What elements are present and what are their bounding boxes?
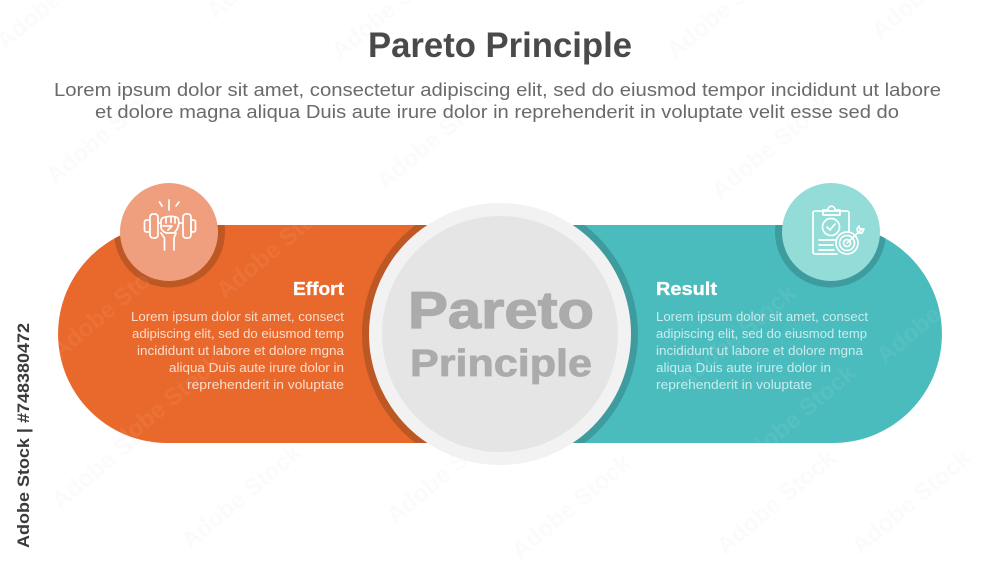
central circle outer ring <box>369 203 631 465</box>
icon: fist with dumbbell <box>120 183 218 281</box>
result body text: Lorem ipsum dolor sit amet, consect <box>656 309 868 324</box>
result watermark <box>672 254 1000 475</box>
effort body text: aliqua Duis aute irure dolor in <box>169 360 344 375</box>
effort body text: adipiscing elit, sed do eiusmod temp <box>132 326 344 341</box>
stock watermark pattern on background: Adobe Stock <box>382 414 512 530</box>
effort heading: Effort <box>293 278 344 299</box>
result icon disc <box>782 183 880 281</box>
effort watermark: Adobe Stock <box>212 189 342 305</box>
panel: effort <box>58 225 428 443</box>
result heading: Result <box>656 278 717 299</box>
stock watermark pattern on background: Adobe Stock <box>372 79 502 195</box>
effort watermark: Adobe Stock <box>97 349 227 465</box>
effort icon disc <box>120 183 218 281</box>
panel: result <box>572 225 942 443</box>
stock watermark pattern on background: Adobe Stock <box>47 399 177 515</box>
central label: Pareto: Pareto <box>408 282 594 340</box>
effort watermark <box>47 189 342 465</box>
clipboard and target glyph <box>813 206 864 254</box>
effort pill inner shadow ring <box>362 225 428 443</box>
stock watermark pattern on background: Adobe Stock <box>507 449 637 563</box>
result body text: incididunt ut labore et dolore mgna <box>656 343 864 358</box>
stock watermark pattern on background: Adobe Stock <box>177 439 307 555</box>
result watermark: Adobe Stock <box>672 279 802 395</box>
result body text <box>656 309 868 392</box>
effort body text: Lorem ipsum dolor sit amet, consect <box>131 309 344 324</box>
effort body text <box>131 309 345 392</box>
stock watermark pattern on background: Adobe Stock <box>712 444 842 560</box>
description text: Lorem ipsum dolor sit amet, consectetur adipiscing elit, sed do eiusmod tempor incididunt ut labore <box>54 80 941 100</box>
description text: et dolore magna aliqua Duis aute irure dolor in reprehenderit in voluptate velit esse sed do <box>95 102 899 122</box>
stock watermark pattern on background: Adobe Stock <box>42 74 172 190</box>
result icon shadow <box>775 225 886 288</box>
result pill inner shadow ring <box>573 225 638 443</box>
central circle <box>369 203 631 465</box>
title: Pareto Principle <box>368 26 632 65</box>
effort watermark: Adobe Stock <box>47 249 177 365</box>
central label: Principle: Principle <box>410 343 592 385</box>
icon: clipboard with target <box>782 183 880 281</box>
effort body text: incididunt ut labore et dolore mgna <box>137 343 345 358</box>
description text <box>54 80 941 122</box>
result pill shape <box>500 225 942 443</box>
stock credit: Adobe Stock | #748380472 <box>14 323 33 548</box>
result body text: adipiscing elit, sed do eiusmod temp <box>656 326 867 341</box>
effort icon shadow <box>114 225 225 288</box>
dumbbell and fist glyph <box>144 200 196 250</box>
effort body text: reprehenderit in voluptate <box>187 377 344 392</box>
stock watermark pattern on background: Adobe Stock <box>707 89 837 205</box>
result body text: aliqua Duis aute irure dolor in <box>656 360 831 375</box>
result watermark: Adobe Stock <box>872 254 1000 370</box>
result watermark: Adobe Stock <box>732 359 862 475</box>
central circle inner disc <box>382 216 618 452</box>
stock watermark pattern on background: Adobe Stock <box>847 444 977 560</box>
result body text: reprehenderit in voluptate <box>656 377 812 392</box>
effort pill shape <box>58 225 500 443</box>
